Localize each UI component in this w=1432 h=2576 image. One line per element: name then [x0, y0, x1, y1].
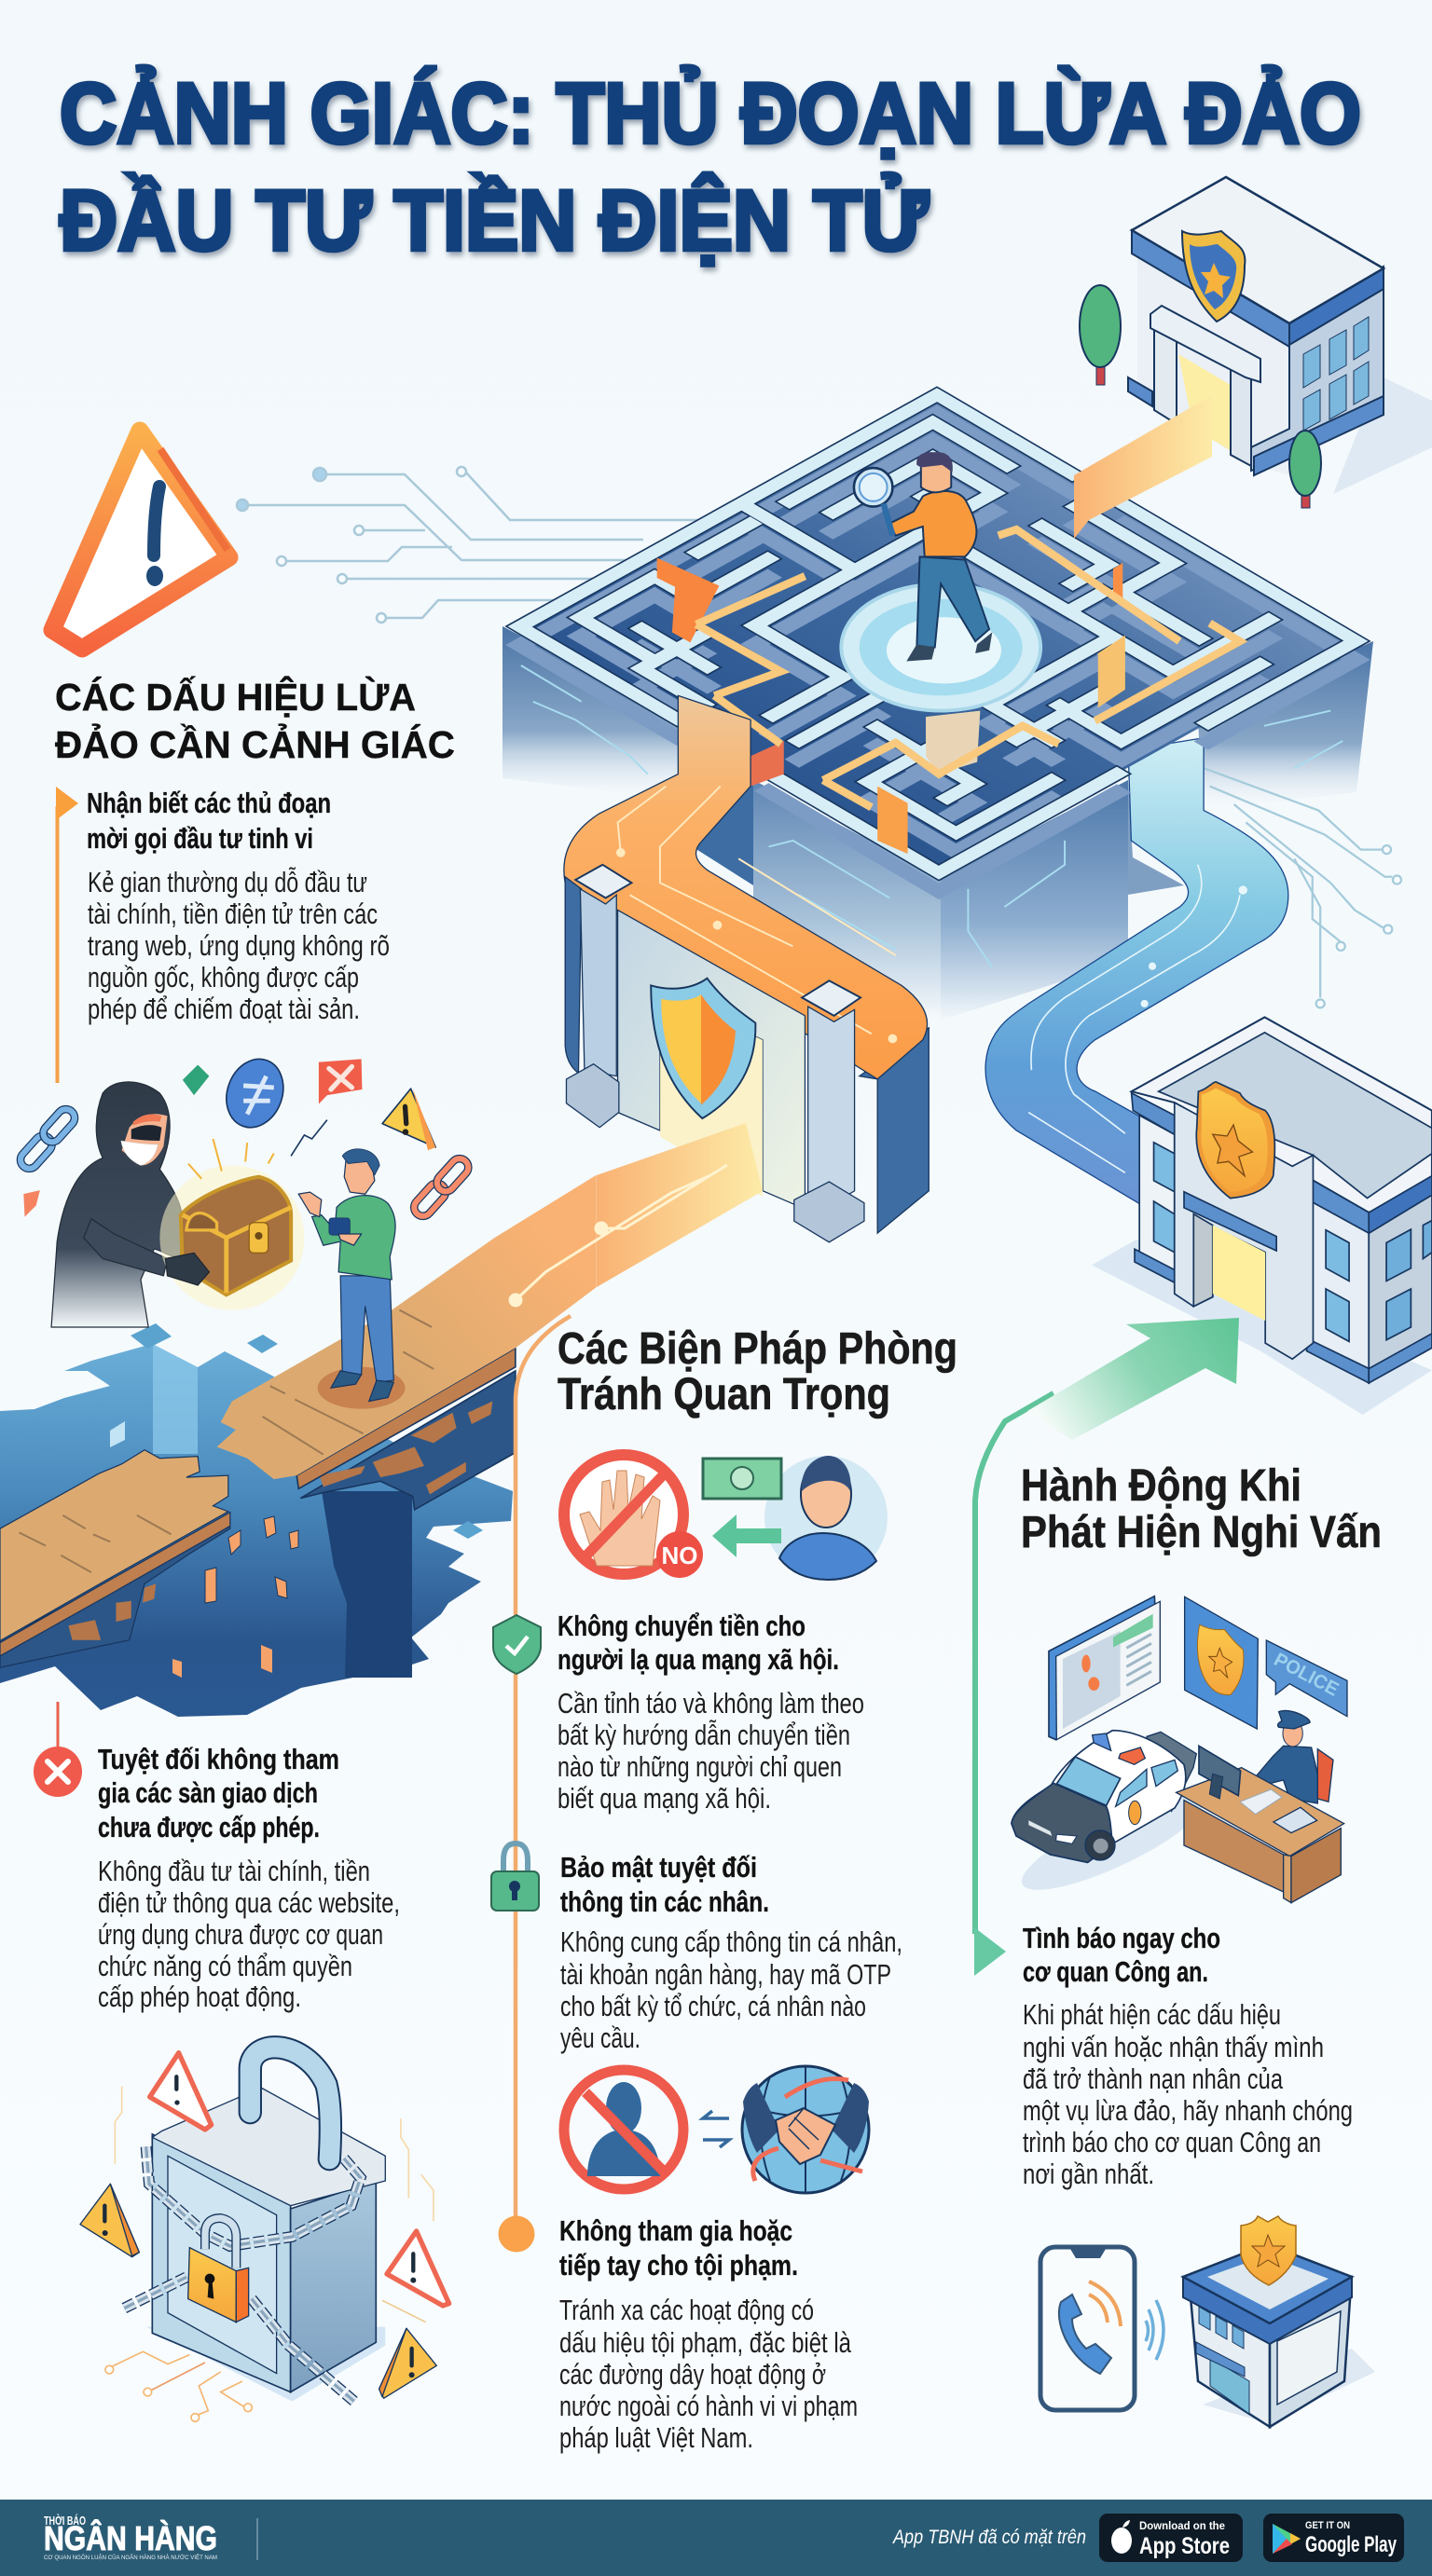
speech bubble: police — [1266, 1640, 1347, 1717]
broken bridge — [0, 1175, 597, 1667]
google play button — [1263, 2514, 1404, 2562]
man's shadow — [318, 1367, 406, 1409]
text: warning signs heading: CÁC DẤU HIỆU LỪA — [55, 676, 416, 719]
text block: report to police: nghi vấn hoặc nhận thấy mình — [1023, 2031, 1324, 2063]
text block: no accomplice: Tránh xa các hoạt động có — [559, 2294, 814, 2326]
trees — [1080, 285, 1321, 508]
text block: secure information: tài khoản ngân hàng, hay mã OTP — [560, 1958, 891, 1991]
chasm details — [110, 1323, 483, 1678]
text block: unlicensed exchanges: gia các sàn giao dịch — [98, 1776, 318, 1809]
icon: warning triangle — [52, 431, 229, 649]
app store button — [1099, 2514, 1243, 2562]
icon: no money transfer — [564, 1455, 888, 1580]
icon: green padlock — [491, 1843, 539, 1911]
lower police station — [1092, 1017, 1432, 1415]
text block: report to police: Tình báo ngay cho — [1023, 1922, 1220, 1954]
text block: unlicensed exchanges: chưa được cấp phép. — [98, 1811, 320, 1843]
logo — [44, 2514, 217, 2561]
road circuit lines — [510, 1165, 727, 1306]
right segment underside — [300, 1371, 516, 1510]
maze wall circuit lines — [521, 665, 1342, 967]
chain — [124, 2146, 361, 2402]
red marker — [34, 1702, 82, 1797]
text block: recognise scams: phép để chiếm đoạt tài sản. — [88, 993, 360, 1025]
text block: report to police: Khi phát hiện các dấu hiệu — [1023, 1998, 1281, 2031]
money note — [703, 1456, 888, 1579]
right segment edge — [296, 1348, 516, 1488]
gate with shield — [564, 695, 929, 1242]
text block: no transfers: biết qua mạng xã hội. — [558, 1782, 771, 1815]
gold lock — [205, 2218, 236, 2268]
text block: report to police: cơ quan Công an. — [1023, 1955, 1208, 1988]
police car — [1012, 1731, 1213, 1907]
title: CẢNH GIÁC: THỦ ĐOẠN LỪA ĐẢO — [60, 65, 1361, 161]
maze glowing orange paths — [657, 529, 1240, 854]
scammer scene — [17, 1051, 472, 1402]
text block: unlicensed exchanges: điện tử thông qua các website, — [98, 1886, 400, 1919]
officer — [1247, 1710, 1333, 1803]
icon: chained padlock — [80, 2048, 449, 2421]
text block: no transfers: nào từ những người chỉ quen — [558, 1750, 842, 1783]
title — [60, 65, 1361, 268]
left segment deck — [0, 1450, 228, 1641]
gold badge — [1196, 1082, 1274, 1199]
floating icons — [217, 1051, 293, 1135]
text block: report to police — [1023, 1922, 1353, 2190]
text block: recognise scams: nguồn gốc, không được cấp — [88, 961, 359, 993]
brick patches — [320, 1402, 492, 1494]
text block: recognise scams: tài chính, tiền điện tử trên các — [88, 897, 378, 930]
roof — [1132, 1017, 1432, 1213]
green arrow to police station — [974, 1318, 1239, 1976]
text block: recognise scams — [87, 787, 390, 1025]
text block: secure information: Không cung cấp thông tin cá nhân, — [560, 1925, 902, 1958]
text: warning signs heading — [55, 676, 455, 766]
icon: upper police station — [1128, 177, 1432, 494]
no person — [564, 2070, 683, 2189]
text block: no accomplice: Không tham gia hoặc — [559, 2214, 792, 2247]
ground shadow — [1092, 1240, 1432, 1415]
text block: secure information: cho bất kỳ tổ chức, cá nhân nào — [560, 1990, 866, 2022]
text block: secure information: yêu cầu. — [560, 2021, 640, 2054]
app store button: Download on the — [1139, 2519, 1225, 2532]
text block: unlicensed exchanges: Tuyệt đối không tham — [98, 1743, 339, 1775]
maze illustration — [503, 285, 1401, 1287]
icon: small police station — [1183, 2216, 1375, 2427]
text block: recognise scams: Kẻ gian thường dụ dỗ đầu tư — [88, 866, 367, 898]
text block: recognise scams: Nhận biết các thủ đoạn — [87, 787, 331, 819]
heading: actions — [1021, 1461, 1382, 1557]
left wing — [1139, 1116, 1175, 1281]
thief — [51, 1082, 186, 1327]
circuit lines from warning triangle — [237, 467, 709, 623]
exchange arrows — [703, 2111, 729, 2147]
chain icons — [17, 1105, 472, 1220]
speech bubble: police: POLICE — [1271, 1649, 1342, 1701]
text block: secure information: thông tin các nhân. — [560, 1885, 769, 1918]
heading: prevention measures: Các Biện Pháp Phòng — [558, 1324, 957, 1374]
left segment side — [0, 1514, 230, 1667]
heading: actions: Hành Động Khi — [1021, 1461, 1301, 1511]
maze top — [520, 395, 1356, 891]
circuit lines right of maze — [1204, 768, 1401, 1007]
text block: no transfers: người lạ qua mạng xã hội. — [558, 1643, 839, 1676]
app availability note: App TBNH đã có mặt trên — [891, 2527, 1086, 2548]
text block: report to police: đã trở thành nạn nhân của — [1023, 2062, 1284, 2095]
text block: secure information — [560, 1851, 902, 2054]
person with magnifying glass — [841, 452, 1040, 711]
globe with handshake — [742, 2066, 869, 2193]
title: ĐẦU TƯ TIỀN ĐIỆN TỬ — [60, 172, 929, 268]
icon: green shield check — [493, 1615, 541, 1674]
person — [779, 1456, 876, 1580]
text block: unlicensed exchanges: chức năng có thẩm quyền — [98, 1950, 352, 1982]
logo: CƠ QUAN NGÔN LUẬN CỦA NGÂN HÀNG NHÀ NƯỚC VIỆT NAM — [44, 2553, 217, 2561]
map screen — [1049, 1596, 1160, 1740]
entrance portal — [1175, 1103, 1313, 1359]
orange center timeline — [498, 1316, 571, 2252]
text block: no transfers: Không chuyển tiền cho — [558, 1610, 806, 1642]
footer bar — [0, 2500, 1432, 2576]
shackle — [250, 2048, 330, 2159]
chasm — [0, 1344, 513, 1717]
text block: report to police: trình báo cho cơ quan Công an — [1023, 2126, 1321, 2158]
text block: no transfers: Cần tỉnh táo và không làm theo — [558, 1687, 864, 1720]
icon: phone calling — [1040, 2247, 1164, 2410]
text block: report to police: nơi gần nhất. — [1023, 2158, 1154, 2190]
text block: no accomplice — [559, 2214, 858, 2454]
warning triangles — [80, 2053, 449, 2398]
road: blue path — [985, 738, 1288, 1206]
desk with monitor — [1177, 1746, 1344, 1903]
green arrow — [712, 1514, 781, 1557]
text block: no accomplice: dấu hiệu tội phạm, đặc biệt là — [559, 2326, 852, 2359]
text block: no transfers — [558, 1610, 864, 1815]
heading: prevention measures: Tránh Quan Trọng — [558, 1370, 890, 1419]
badge panel — [1185, 1596, 1258, 1729]
text block: unlicensed exchanges — [98, 1743, 400, 2013]
logo: NGÂN HÀNG — [44, 2518, 217, 2557]
heading: actions: Phát Hiện Nghi Vấn — [1021, 1508, 1382, 1557]
right wing — [1307, 1179, 1369, 1383]
police scene — [1012, 1596, 1347, 1907]
text block: recognise scams: mời gọi đầu tư tinh vi — [87, 822, 313, 855]
no-hand sign: NO — [662, 1541, 697, 1569]
text block: no accomplice: nước ngoài có hành vi vi phạm — [559, 2390, 858, 2422]
icon: no criminals and handshake globe — [564, 2066, 869, 2193]
road: orange path from gate to bridge — [597, 1123, 763, 1287]
man — [340, 1276, 393, 1382]
no-hand sign — [564, 1455, 703, 1578]
padlock body — [152, 2134, 291, 2392]
treasure chest — [159, 1166, 304, 1310]
text block: unlicensed exchanges: Không đầu tư tài chính, tiền — [98, 1855, 370, 1887]
text block: no transfers: bất kỳ hướng dẫn chuyển tiền — [558, 1719, 850, 1751]
text block: unlicensed exchanges: ứng dụng chưa được cơ quan — [98, 1918, 383, 1951]
orange marker and line — [56, 787, 78, 1083]
heading: prevention measures — [558, 1324, 957, 1419]
text block: recognise scams: trang web, ứng dụng không rõ — [88, 929, 390, 962]
logo: THỜI BÁO — [44, 2514, 86, 2528]
maze side walls — [503, 626, 1373, 1021]
road: orange path to upper police station — [1074, 395, 1212, 539]
google play button: Google Play — [1305, 2532, 1397, 2557]
app store button: App Store — [1139, 2533, 1230, 2559]
text block: no accomplice: pháp luật Việt Nam. — [559, 2421, 753, 2454]
text block: no accomplice: các đường dây hoạt động ở — [559, 2358, 826, 2391]
text block: secure information: Bảo mật tuyệt đối — [560, 1851, 757, 1884]
right segment deck — [217, 1175, 597, 1479]
text block: no accomplice: tiếp tay cho tội phạm. — [559, 2249, 798, 2281]
text: warning signs heading: ĐẢO CẦN CẢNH GIÁC — [55, 723, 455, 766]
text block: unlicensed exchanges: cấp phép hoạt động. — [98, 1980, 301, 2013]
google play button: GET IT ON — [1305, 2520, 1350, 2531]
